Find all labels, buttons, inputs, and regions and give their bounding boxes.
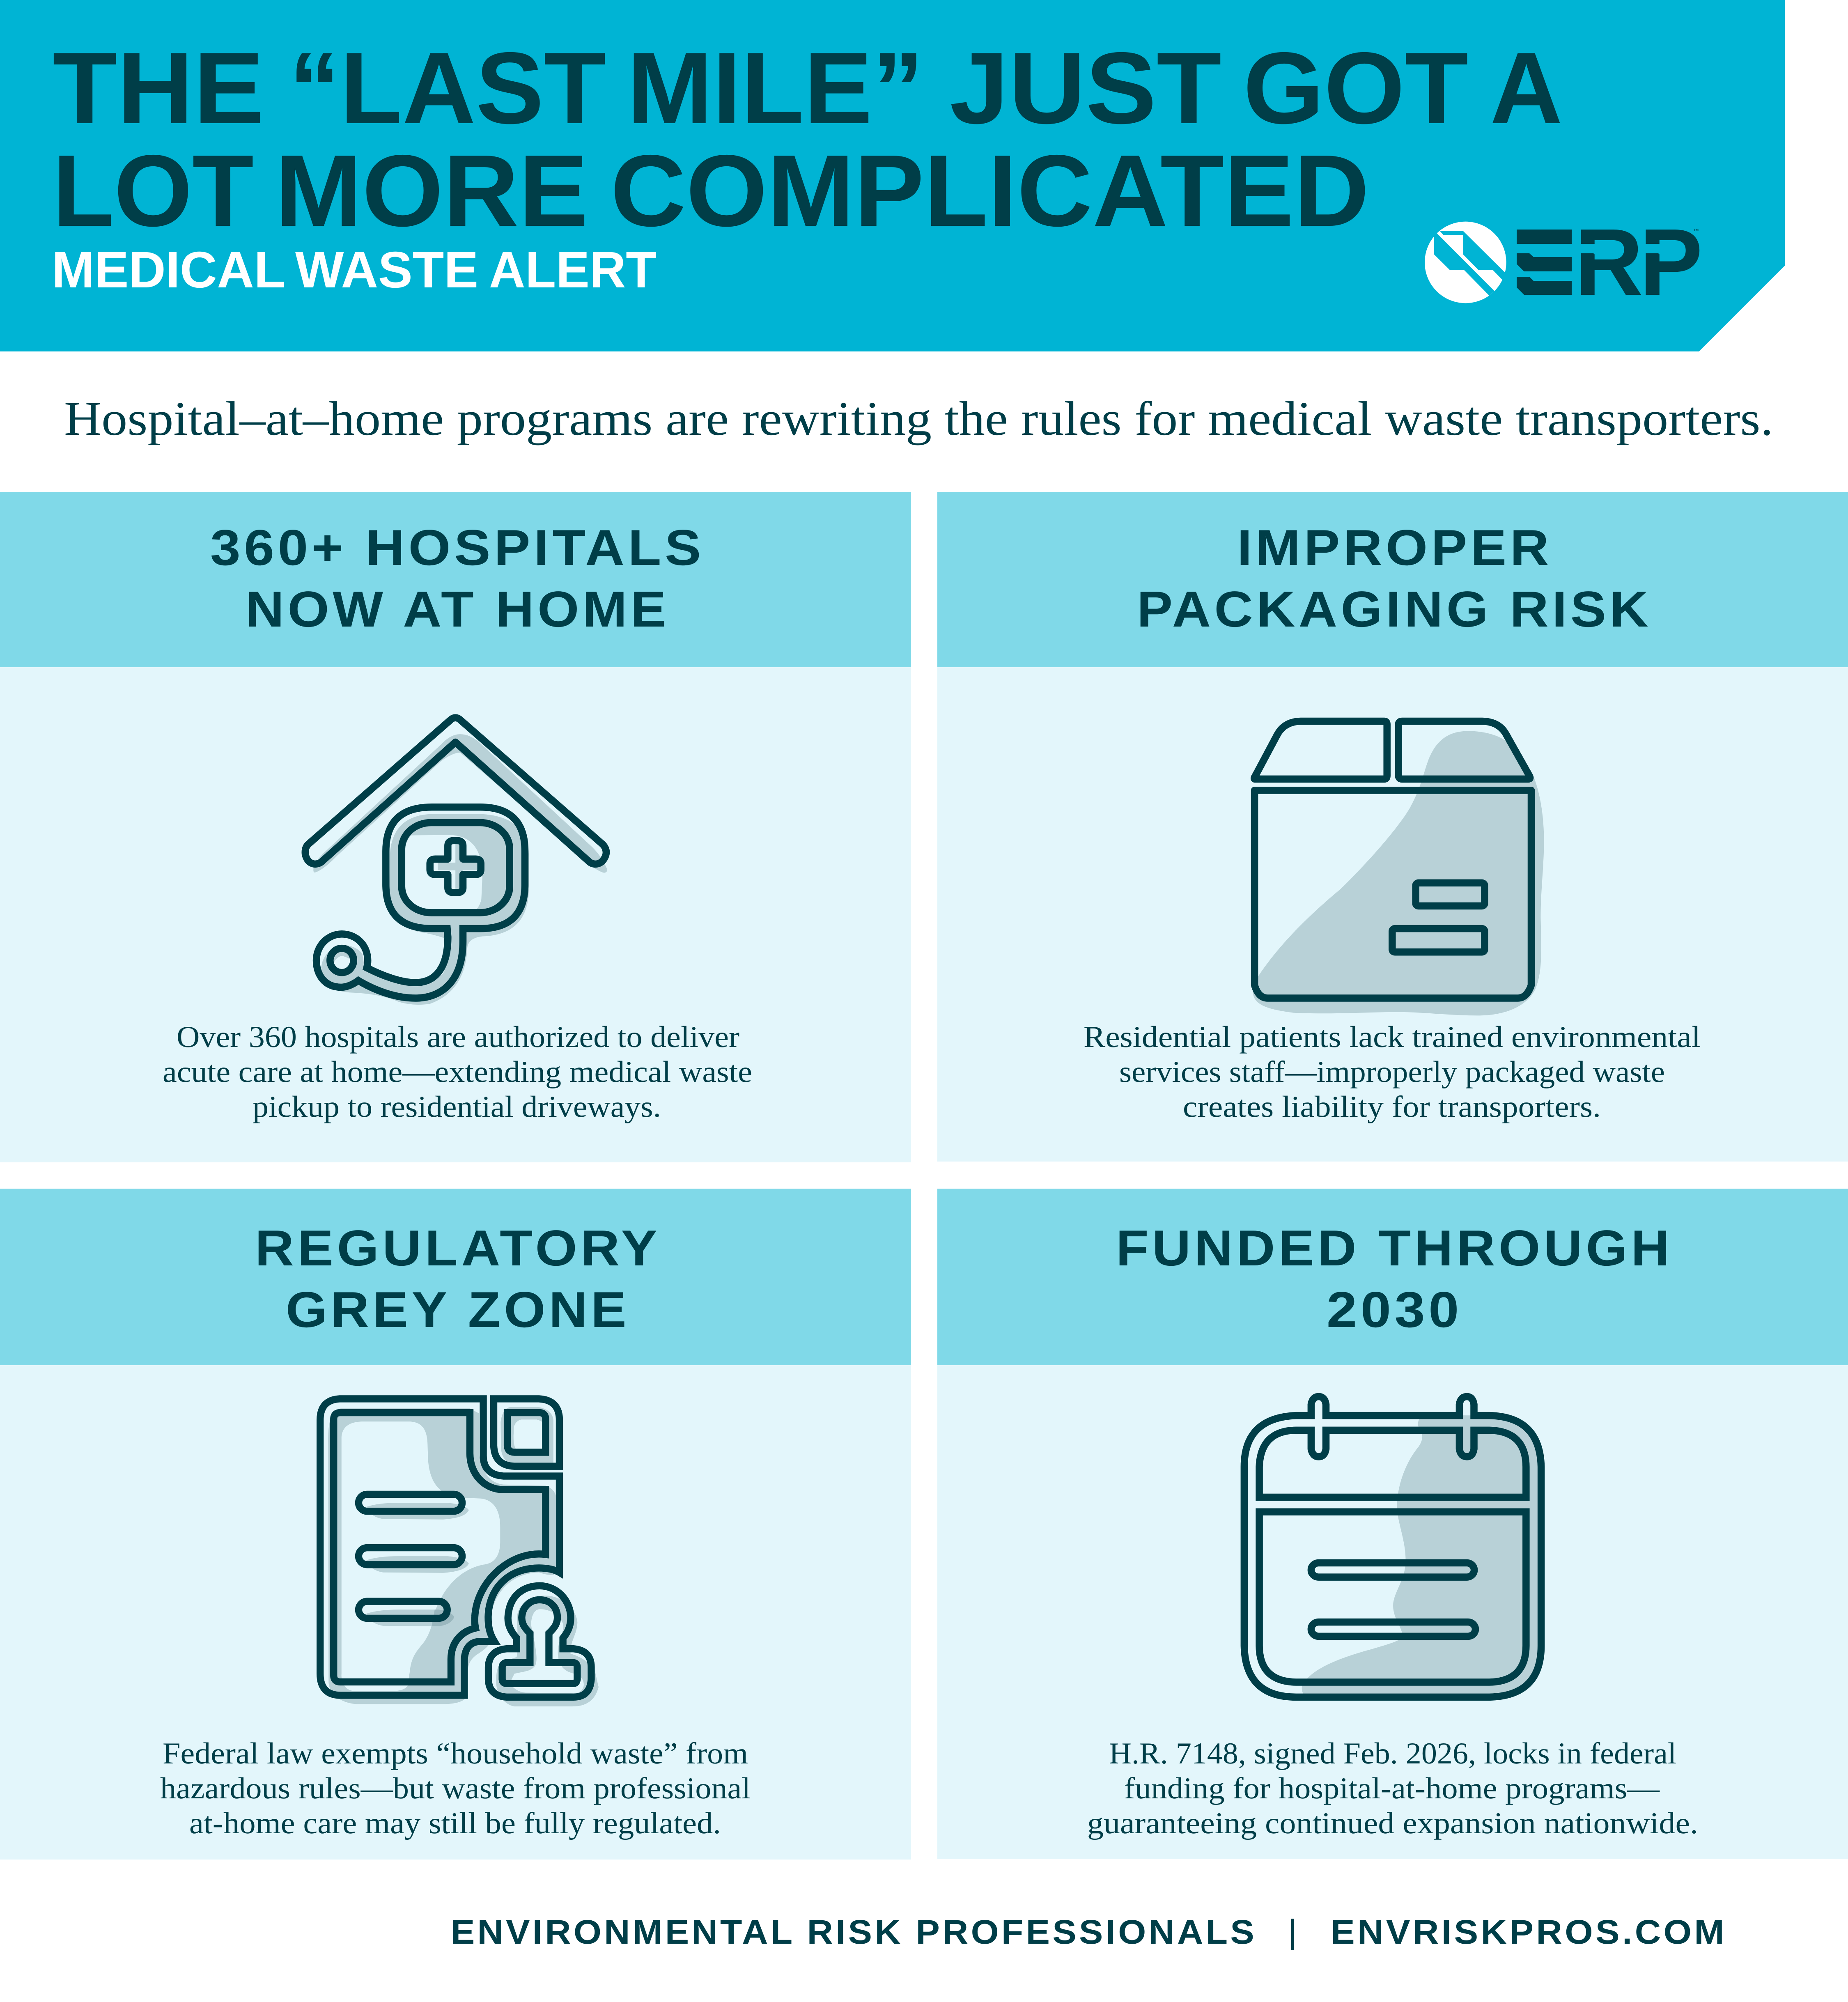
panel heading: FUNDED THROUGH xyxy=(1116,1220,1673,1277)
title: LOT xyxy=(53,133,254,248)
subtitle: MEDICAL xyxy=(52,241,285,298)
subtitle: ALERT xyxy=(489,241,657,298)
title: COMPLICATED xyxy=(611,133,1369,248)
icon: house with stethoscope xyxy=(305,718,607,1005)
panel heading: 2030 xyxy=(1327,1282,1462,1338)
panel text: acute care at home—extending medical waste xyxy=(163,1055,752,1089)
panel heading xyxy=(210,520,705,638)
subtitle xyxy=(52,241,657,298)
logo wordmark: ERP xyxy=(1512,209,1703,315)
panel: regulatory grey zone xyxy=(0,1189,911,1860)
tagline: Hospital–at–home programs are rewriting the rules for medical waste transporters. xyxy=(64,392,1773,445)
panel text: creates liability for transporters. xyxy=(1183,1090,1601,1124)
footer: ENVIRONMENTAL RISK PROFESSIONALS xyxy=(451,1913,1257,1951)
panel heading: 360+ HOSPITALS xyxy=(210,520,705,576)
footer: ENVRISKPROS.COM xyxy=(1331,1913,1727,1951)
icon: calendar xyxy=(1244,1396,1541,1698)
panel text xyxy=(163,1020,752,1124)
icon: cardboard box xyxy=(1253,721,1544,1015)
panel heading: NOW AT HOME xyxy=(246,581,670,638)
panel text xyxy=(1084,1020,1701,1124)
panel heading xyxy=(255,1220,661,1338)
panel text: at-home care may still be fully regulated. xyxy=(189,1807,721,1840)
panel text: H.R. 7148, signed Feb. 2026, locks in federal xyxy=(1109,1737,1676,1770)
panel text: Over 360 hospitals are authorized to deliver xyxy=(177,1020,739,1054)
title: GOT xyxy=(1243,31,1468,145)
logo mark xyxy=(1425,222,1506,303)
panel heading: PACKAGING RISK xyxy=(1137,581,1652,638)
title: JUST xyxy=(950,31,1221,145)
panel text: pickup to residential driveways. xyxy=(253,1090,661,1124)
panel text xyxy=(1087,1737,1698,1840)
header banner xyxy=(0,0,1785,351)
panel text: funding for hospital-at-home programs— xyxy=(1124,1772,1660,1805)
logo wordmark: ™ xyxy=(1693,227,1699,234)
panel text: guaranteeing continued expansion nationwide. xyxy=(1087,1807,1698,1840)
panel text: hazardous rules—but waste from professional xyxy=(160,1772,751,1805)
panel text xyxy=(160,1737,751,1840)
title: MORE xyxy=(275,133,588,248)
panel: 360+ hospitals xyxy=(0,492,911,1162)
icon: document with stamp xyxy=(320,1399,599,1706)
panel heading: GREY ZONE xyxy=(286,1282,630,1338)
title: MILE” xyxy=(627,31,924,145)
panel heading: REGULATORY xyxy=(255,1220,661,1277)
title: A xyxy=(1490,31,1563,145)
panel: improper packaging risk xyxy=(937,492,1848,1162)
panel: funded through 2030 xyxy=(937,1189,1848,1859)
panel text: Residential patients lack trained environmental xyxy=(1084,1020,1701,1054)
title xyxy=(53,31,1563,248)
title: “LAST xyxy=(289,31,606,145)
panel heading: IMPROPER xyxy=(1237,520,1552,576)
title: THE xyxy=(53,31,264,145)
footer xyxy=(451,1913,1727,1951)
subtitle: WASTE xyxy=(295,241,478,298)
panel text: services staff—improperly packaged waste xyxy=(1119,1055,1665,1089)
logo: ERP xyxy=(1425,209,1703,315)
panel text: Federal law exempts “household waste” from xyxy=(163,1737,748,1770)
panel heading xyxy=(1116,1220,1673,1338)
panel heading xyxy=(1137,520,1652,638)
